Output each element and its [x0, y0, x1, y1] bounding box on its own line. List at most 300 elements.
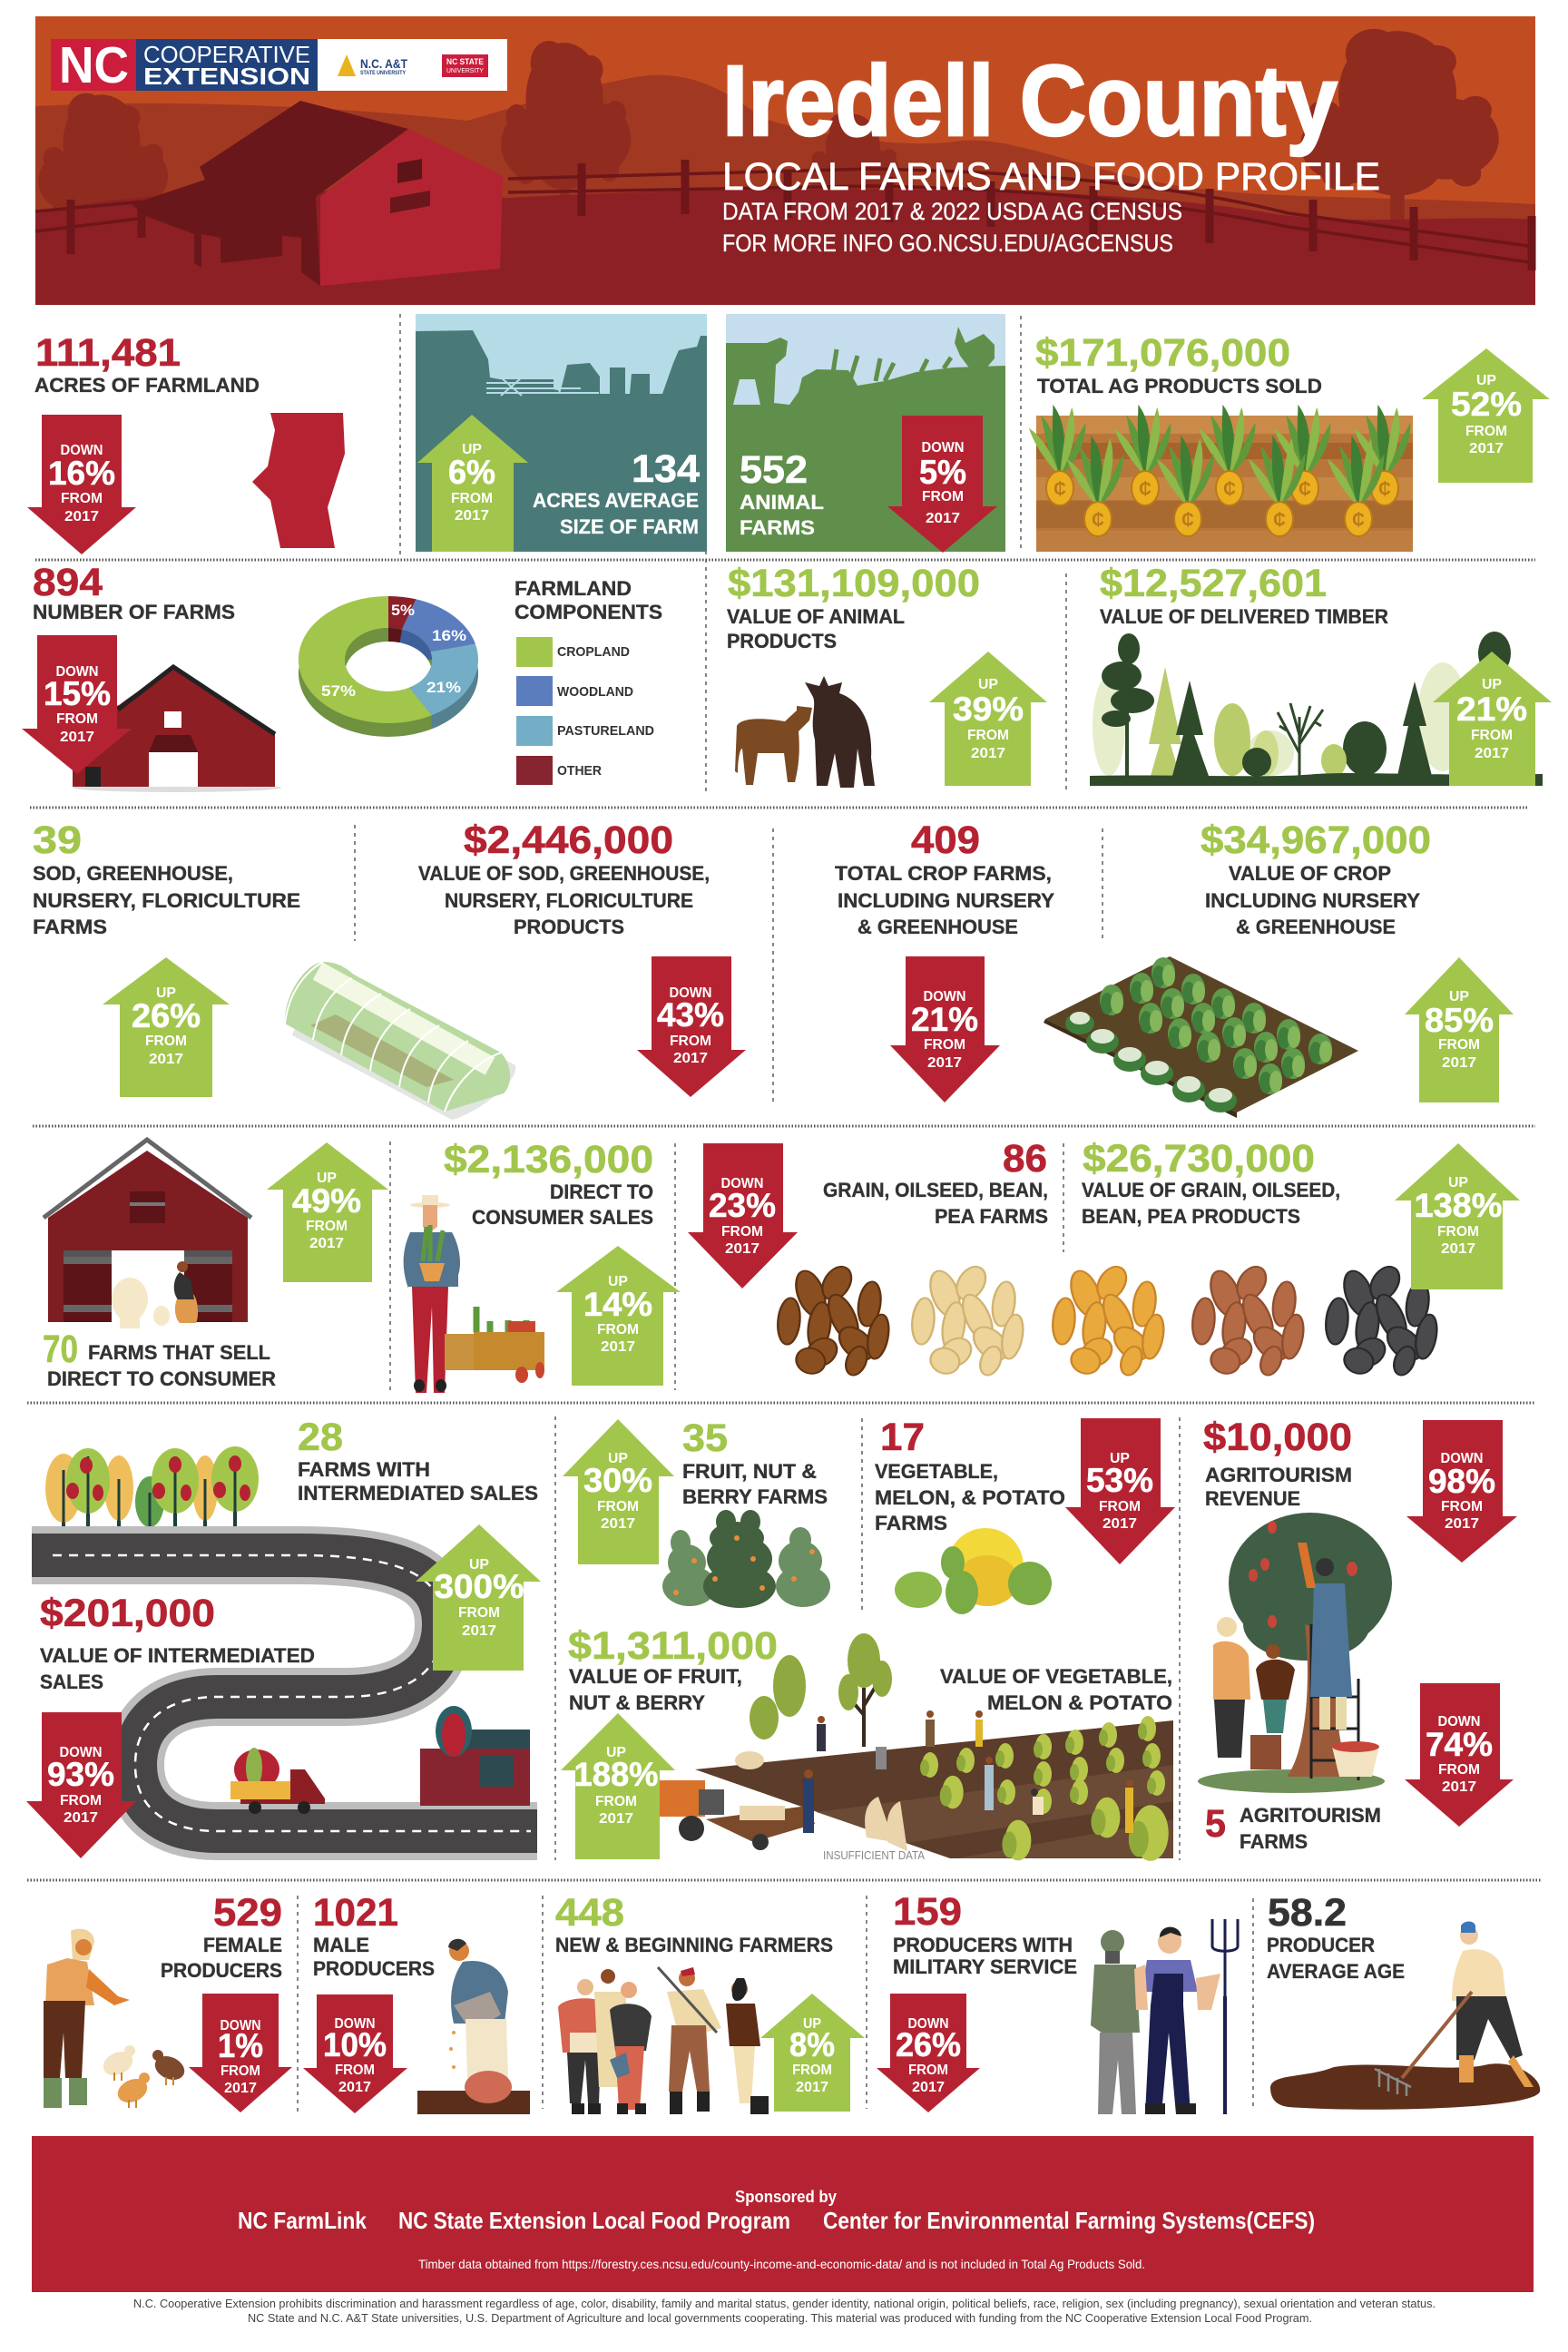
arrow: up 52%: 52% — [1451, 386, 1522, 423]
orchard trees — [750, 1633, 892, 1747]
value: 86 — [1003, 1137, 1047, 1181]
arrow: up 53% — [1065, 1418, 1175, 1564]
farms value: 894 — [33, 561, 103, 604]
soldier and farmer illustration — [1091, 1919, 1238, 2114]
farm field scene — [660, 1633, 1173, 1861]
arrow: down 16%: FROM — [61, 491, 103, 506]
header banner — [35, 16, 1535, 305]
average size label: SIZE OF FARM — [560, 515, 699, 538]
tractor and trailer — [660, 1780, 815, 1850]
arrow: down 74%: DOWN — [1437, 1714, 1481, 1730]
slice labels: 16% — [432, 627, 466, 644]
logo: NC — [59, 36, 129, 94]
arrow: up 6%: FROM — [451, 491, 493, 506]
arrow: up 6% — [417, 415, 528, 552]
arrow: up 188%: 188% — [573, 1756, 659, 1793]
arrow: down 23%: DOWN — [720, 1176, 764, 1191]
label — [1205, 862, 1420, 938]
value: 409 — [911, 818, 980, 862]
road — [32, 1555, 537, 1831]
panel: total ag products sold — [1029, 331, 1550, 552]
value of intermediated: $201,000 — [40, 1592, 215, 1635]
logo: N.C. A&T — [360, 56, 407, 71]
value: 58.2 — [1268, 1891, 1347, 1935]
arrow: up 39%: 39% — [953, 691, 1024, 728]
arrow: up 138%: 2017 — [1441, 1241, 1475, 1257]
chicken — [955, 327, 995, 370]
label: MILITARY SERVICE — [893, 1955, 1077, 1978]
arrow: down 93%: 2017 — [64, 1810, 98, 1826]
arrow: up 30%: UP — [608, 1451, 628, 1466]
arrow: up 8%: UP — [803, 2016, 821, 2032]
arrow: up 49%: FROM — [306, 1219, 348, 1234]
arrow: up 21% — [1433, 652, 1552, 786]
label: & GREENHOUSE — [858, 916, 1018, 938]
agritourism farms label — [1240, 1804, 1381, 1853]
arrow: down 1% — [189, 1994, 292, 2112]
arrow: down 5%: FROM — [922, 489, 964, 505]
cow leg gap — [733, 379, 760, 405]
arrow: up 300%: UP — [469, 1557, 489, 1573]
arrow: down 15% — [22, 635, 132, 774]
arrow: down 1%: 2017 — [224, 2081, 257, 2096]
arrow: up 138%: 138% — [1414, 1187, 1503, 1224]
vegetable label: MELON & POTATO — [987, 1691, 1172, 1714]
slice labels: 21% — [426, 679, 461, 696]
arrow: down 16%: 16% — [48, 455, 115, 492]
acres label: ACRES OF FARMLAND — [34, 374, 260, 397]
17 label: FARMS — [875, 1512, 947, 1534]
arrow: down 21%: 2017 — [927, 1055, 962, 1071]
arrow: down 21% — [890, 956, 1000, 1102]
arrow: down 74%: 74% — [1426, 1726, 1493, 1763]
arrow: down 5% — [887, 416, 997, 553]
fence — [486, 379, 554, 396]
arrow: up 39%: UP — [978, 677, 998, 692]
arrow: down 93% — [26, 1712, 136, 1858]
man raking soil illustration — [1270, 1922, 1540, 2110]
value label — [40, 1644, 315, 1693]
35 label: FRUIT, NUT & — [682, 1460, 817, 1483]
arrow: down 16%: DOWN — [60, 443, 103, 458]
sponsor names: NC FarmLink — [238, 2207, 367, 2234]
sacks — [735, 1751, 907, 1851]
title: Iredell County — [722, 45, 1338, 157]
label: INCLUDING NURSERY — [838, 889, 1054, 912]
arrow: up 188%: UP — [606, 1745, 626, 1760]
arrow: down 43%: 2017 — [673, 1051, 708, 1066]
label: PRODUCER — [1267, 1934, 1375, 1956]
panel: new and beginning farmers — [555, 1891, 865, 2114]
label: DIRECT TO CONSUMER — [47, 1367, 276, 1390]
plants — [830, 349, 951, 390]
label: VALUE OF GRAIN, OILSEED, — [1082, 1179, 1340, 1201]
arrow: up 14%: 2017 — [601, 1339, 635, 1355]
sponsor names: Center for Environmental Farming Systems(CEFS) — [823, 2207, 1315, 2234]
carrot field illustration — [1029, 405, 1413, 552]
17 label: MELON, & POTATO — [875, 1486, 1065, 1509]
panel: fruit nut berry farms — [563, 1416, 830, 1608]
arrow: down 26%: FROM — [908, 2063, 948, 2078]
panel: direct to consumer sales — [404, 1138, 681, 1393]
panel: value of crop — [1044, 818, 1514, 1118]
arrow: up 52%: FROM — [1465, 424, 1507, 439]
average size label — [533, 489, 699, 538]
arrow: down 98%: 2017 — [1445, 1516, 1479, 1532]
label — [835, 862, 1054, 938]
woman feeding chickens — [44, 1929, 188, 2108]
arrow: up 21%: 2017 — [1475, 746, 1509, 761]
28 label: FARMS WITH — [298, 1458, 430, 1481]
store building — [420, 1706, 530, 1806]
sod farms label: FARMS — [33, 916, 107, 938]
label: AVERAGE AGE — [1267, 1960, 1405, 1983]
trees silhouette — [38, 29, 1499, 266]
animal farms label: ANIMAL — [740, 491, 824, 514]
panel: value of animal products — [727, 562, 1047, 788]
panel: producer average age — [1267, 1891, 1540, 2110]
timber label: VALUE OF DELIVERED TIMBER — [1100, 605, 1388, 628]
arrow: down 1%: FROM — [220, 2063, 260, 2079]
panel: sod greenhouse farms — [33, 818, 515, 1120]
legend: farmland components: WOODLAND — [557, 684, 633, 700]
label: FARMS THAT SELL — [88, 1341, 270, 1364]
delivery truck — [230, 1748, 325, 1814]
arrow: up 53%: 53% — [1086, 1462, 1153, 1499]
17 value: 17 — [880, 1416, 925, 1459]
data source line: DATA FROM 2017 & 2022 USDA AG CENSUS — [722, 198, 1182, 225]
arrow: down 10%: 10% — [323, 2026, 387, 2063]
arrow: down 10%: FROM — [335, 2063, 375, 2078]
panel: producers with military service — [877, 1890, 1238, 2114]
value label: SALES — [40, 1671, 103, 1693]
agritourism farms value: 5 — [1205, 1802, 1226, 1846]
orchard trees — [45, 1446, 259, 1529]
field workers — [803, 1710, 1133, 1833]
other slice — [388, 596, 416, 630]
arrow: up 49%: 2017 — [309, 1236, 344, 1251]
sod farms label: NURSERY, FLORICULTURE — [33, 889, 300, 912]
arrow: down 98%: FROM — [1441, 1499, 1483, 1514]
label: TOTAL CROP FARMS, — [835, 862, 1052, 885]
legend: farmland components: CROPLAND — [557, 644, 630, 660]
label: INCLUDING NURSERY — [1205, 889, 1420, 912]
label — [1082, 1179, 1340, 1228]
arrow: down 16% — [27, 415, 136, 554]
sponsor names: NC State Extension Local Food Program — [398, 2207, 790, 2234]
farm silhouette — [416, 330, 707, 552]
arrow: up 138% — [1395, 1143, 1520, 1289]
arrow: up 14%: FROM — [597, 1322, 639, 1338]
icon: cow and calf — [735, 676, 875, 788]
logo: NC STATE — [446, 57, 484, 66]
arrow: up 53%: UP — [1110, 1451, 1130, 1466]
barn — [132, 101, 503, 286]
panel: intermediated sales — [26, 1416, 541, 1858]
total sold label: TOTAL AG PRODUCTS SOLD — [1037, 375, 1322, 397]
sponsor names — [238, 2207, 1315, 2234]
arrow: up 138%: FROM — [1437, 1224, 1479, 1240]
value label: VALUE OF INTERMEDIATED — [40, 1644, 315, 1667]
animal farms label — [740, 491, 824, 539]
label — [1267, 1934, 1405, 1983]
label: PEA FARMS — [935, 1205, 1048, 1228]
fruit label — [569, 1665, 742, 1714]
arrow: down 98%: 98% — [1428, 1463, 1495, 1500]
arrow: up 26%: UP — [156, 985, 176, 1001]
panel: vegetable melon potato farms — [875, 1416, 1175, 1614]
panel: animal farms — [726, 314, 1005, 553]
arrow: down 15%: 15% — [44, 675, 111, 712]
arrow: up 53%: 2017 — [1102, 1516, 1137, 1532]
agritourism farms label: AGRITOURISM — [1240, 1804, 1381, 1827]
revenue label: REVENUE — [1205, 1487, 1300, 1510]
arrow: up 52% — [1422, 348, 1550, 483]
arrow: down 10%: DOWN — [334, 2016, 376, 2032]
sod farms value: 39 — [33, 818, 82, 862]
label: NEW & BEGINNING FARMERS — [555, 1934, 833, 1956]
arrow: up 300% — [416, 1524, 541, 1671]
label: PRODUCTS — [514, 916, 624, 938]
arrow: up 85% — [1405, 957, 1514, 1102]
arrow: up 8%: 2017 — [796, 2080, 828, 2095]
arrow: up 52%: UP — [1476, 373, 1496, 388]
crop plot illustration — [1044, 956, 1358, 1118]
panel: value of fruit nut berry and vegetable melon potato — [561, 1624, 1173, 1862]
arrow: up 26%: 26% — [132, 997, 201, 1034]
animal label: PRODUCTS — [727, 630, 837, 652]
value: 448 — [555, 1891, 624, 1935]
arrow: up 21%: FROM — [1471, 728, 1513, 743]
arrow: up 26%: FROM — [145, 1034, 187, 1049]
animal farms label: FARMS — [740, 516, 815, 539]
arrow: down 10% — [303, 1994, 407, 2113]
arrow: down 43%: FROM — [670, 1034, 711, 1049]
arrow: up 6%: 6% — [448, 454, 495, 491]
17 label — [875, 1460, 1065, 1534]
legend: farmland components: PASTURELAND — [557, 723, 654, 739]
average size value: 134 — [632, 447, 700, 491]
panel: number of farms — [22, 561, 281, 792]
farmer with crates illustration — [404, 1195, 544, 1393]
label: & GREENHOUSE — [1236, 916, 1396, 938]
subtitle: LOCAL FARMS AND FOOD PROFILE — [722, 155, 1380, 199]
arrow: down 74%: 2017 — [1442, 1779, 1476, 1795]
arrow: up 26% — [103, 957, 230, 1097]
logo: COOPERATIVE — [143, 41, 310, 68]
agritourism farms label: FARMS — [1240, 1830, 1308, 1853]
fruit value: $1,311,000 — [568, 1624, 778, 1668]
arrow: up 49% — [267, 1142, 388, 1282]
panel: female producers — [44, 1891, 292, 2112]
arrow: up 39%: FROM — [967, 728, 1009, 743]
panel: farms that sell direct to consumer — [42, 1135, 388, 1390]
logo: STATE UNIVERSITY — [360, 71, 406, 76]
revenue label: AGRITOURISM — [1205, 1464, 1352, 1486]
slice labels — [321, 602, 466, 700]
arrow: up 300%: FROM — [458, 1605, 500, 1621]
county map — [252, 413, 345, 548]
label: GRAIN, OILSEED, BEAN, — [823, 1179, 1048, 1201]
vegetable label: VALUE OF VEGETABLE, — [940, 1665, 1172, 1688]
berry bushes — [662, 1510, 830, 1608]
panel: grain oilseed bean pea farms — [688, 1137, 1440, 1377]
label: NURSERY, FLORICULTURE — [445, 889, 693, 912]
legend: farmland components: COMPONENTS — [514, 601, 662, 623]
arrow: down 5%: DOWN — [922, 440, 964, 456]
28 label: INTERMEDIATED SALES — [298, 1482, 538, 1504]
panel: acres average size of farm — [416, 314, 707, 552]
arrow: up 30%: 2017 — [601, 1516, 635, 1532]
panel: total crop farms — [835, 818, 1054, 1102]
28 value: 28 — [298, 1416, 343, 1459]
legend: farmland components: FARMLAND — [514, 577, 632, 600]
group of farmers — [558, 1967, 769, 2114]
animal value: $131,109,000 — [728, 562, 980, 605]
arrow: down 26% — [877, 1994, 980, 2112]
35 label: BERRY FARMS — [682, 1485, 828, 1508]
arrow: up 188%: 2017 — [599, 1811, 633, 1827]
sod farms label: SOD, GREENHOUSE, — [33, 862, 233, 885]
17 label: VEGETABLE, — [875, 1460, 998, 1483]
arrow: down 74% — [1405, 1683, 1514, 1827]
acres value: 111,481 — [35, 331, 181, 375]
arrow: down 43%: DOWN — [670, 985, 711, 1001]
fruit label: NUT & BERRY — [569, 1691, 705, 1714]
donut chart: farmland components — [299, 596, 478, 737]
arrow: down 43%: 43% — [657, 996, 724, 1034]
apple picking illustration — [1198, 1513, 1392, 1793]
timber value: $12,527,601 — [1100, 562, 1327, 605]
arrow: up 52%: 2017 — [1469, 441, 1504, 456]
arrow: up 21%: UP — [1482, 677, 1502, 692]
arrow: down 21%: FROM — [924, 1037, 965, 1053]
panel: value of delivered timber — [1090, 562, 1552, 786]
arrow: up 6%: UP — [462, 442, 482, 457]
arrow: down 15%: DOWN — [56, 664, 98, 680]
legal disclaimer: N.C. Cooperative Extension prohibits discrimination and harassment regardless of age, color, disability, family and marital status, gender identity, national origin, political beliefs, race, religion, sex (including pregnancy), sexual orientation and veteran status. — [133, 2297, 1436, 2310]
arrow: down 93%: FROM — [60, 1793, 102, 1808]
legal disclaimer: NC State and N.C. A&T State universities, U.S. Department of Agriculture and local governments cooperating. This material was produced with funding from the NC Cooperative Extension Local Food Program. — [248, 2311, 1312, 2325]
arrow: down 5%: 2017 — [926, 511, 960, 526]
logo — [51, 36, 507, 94]
28 label — [298, 1458, 538, 1504]
panel: agritourism — [1198, 1416, 1517, 1853]
man feeding pig — [417, 1939, 530, 2114]
label — [418, 862, 710, 938]
panel: male producers — [303, 1891, 530, 2114]
label: PRODUCERS WITH — [893, 1934, 1073, 1956]
logo: UNIVERSITY — [446, 68, 484, 74]
arrow: up 30% — [563, 1419, 674, 1564]
slice labels: 57% — [321, 682, 356, 700]
revenue value: $10,000 — [1203, 1416, 1352, 1459]
sod farms label — [33, 862, 300, 938]
arrow: down 98%: DOWN — [1441, 1451, 1483, 1466]
value: $2,446,000 — [464, 818, 673, 862]
arrow: up 300%: 300% — [434, 1568, 524, 1605]
label — [47, 1341, 276, 1390]
arrow: down 16%: 2017 — [64, 509, 99, 524]
label: MALE — [313, 1934, 369, 1956]
legend: farmland components — [514, 577, 662, 785]
arrow: down 74%: FROM — [1438, 1762, 1480, 1778]
arrow: up 39%: 2017 — [971, 746, 1005, 761]
farms label: NUMBER OF FARMS — [33, 601, 235, 623]
barn illustration with sheep and farmer — [42, 1135, 253, 1328]
slice labels: 5% — [391, 602, 415, 619]
label — [161, 1934, 282, 1982]
arrow: down 15%: 2017 — [60, 730, 94, 745]
arrow: down 26%: 26% — [896, 2026, 961, 2063]
arrow: down 21%: 21% — [911, 1001, 978, 1038]
label: FEMALE — [203, 1934, 282, 1956]
value: 1021 — [313, 1891, 398, 1935]
foreground field — [35, 189, 1535, 305]
arrow: down 23%: FROM — [721, 1224, 763, 1240]
arrow: up 85%: 85% — [1425, 1002, 1494, 1039]
animal farms value: 552 — [740, 448, 808, 492]
arrow: down 23%: 23% — [709, 1187, 776, 1224]
sponsored by: Sponsored by — [735, 2188, 837, 2206]
label — [472, 1181, 653, 1229]
arrow: down 43% — [637, 956, 746, 1097]
melon illustration — [895, 1528, 1052, 1614]
animal label — [727, 605, 905, 652]
label: PRODUCERS — [313, 1957, 435, 1980]
label — [893, 1934, 1077, 1978]
arrow: down 23% — [688, 1143, 798, 1289]
arrow: down 1%: DOWN — [220, 2018, 261, 2034]
arrow: down 93%: 93% — [47, 1756, 114, 1793]
label: DIRECT TO — [550, 1181, 653, 1203]
more info line: FOR MORE INFO GO.NCSU.EDU/AGCENSUS — [722, 230, 1173, 257]
arrow: up 8% — [760, 1994, 865, 2112]
arrow: up 85%: 2017 — [1442, 1055, 1476, 1071]
pasture silhouette — [726, 338, 1005, 552]
arrow: down 21%: DOWN — [924, 989, 965, 1004]
arrow: down 23%: 2017 — [725, 1241, 760, 1257]
label — [823, 1179, 1048, 1228]
value: $2,136,000 — [444, 1138, 653, 1181]
legend: farmland components: OTHER — [557, 763, 602, 779]
label: BEAN, PEA PRODUCTS — [1082, 1205, 1300, 1228]
revenue label — [1205, 1464, 1352, 1510]
arrow: up 14%: UP — [608, 1274, 628, 1289]
donut hole — [345, 628, 432, 691]
value: $34,967,000 — [1200, 818, 1431, 862]
arrow: up 8%: 8% — [789, 2026, 835, 2063]
arrow: up 188%: FROM — [595, 1794, 637, 1809]
arrow: up 39% — [929, 652, 1047, 786]
arrow: up 14%: 14% — [583, 1286, 652, 1323]
far hills — [35, 75, 1535, 305]
vegetable label — [940, 1665, 1172, 1714]
arrow: down 1%: 1% — [218, 2027, 263, 2064]
arrow: up 14% — [556, 1246, 681, 1386]
35 value: 35 — [682, 1416, 728, 1460]
value: 529 — [213, 1891, 282, 1935]
seed illustrations — [776, 1263, 1440, 1377]
35 label — [682, 1460, 828, 1508]
arrow: up 30%: 30% — [583, 1462, 652, 1499]
label: VALUE OF CROP — [1229, 862, 1391, 885]
total sold value: $171,076,000 — [1035, 331, 1290, 375]
arrow: up 300%: 2017 — [462, 1623, 496, 1639]
arrow: down 26%: DOWN — [907, 2016, 949, 2032]
fence — [35, 160, 1535, 270]
greenhouse illustration — [285, 962, 515, 1120]
